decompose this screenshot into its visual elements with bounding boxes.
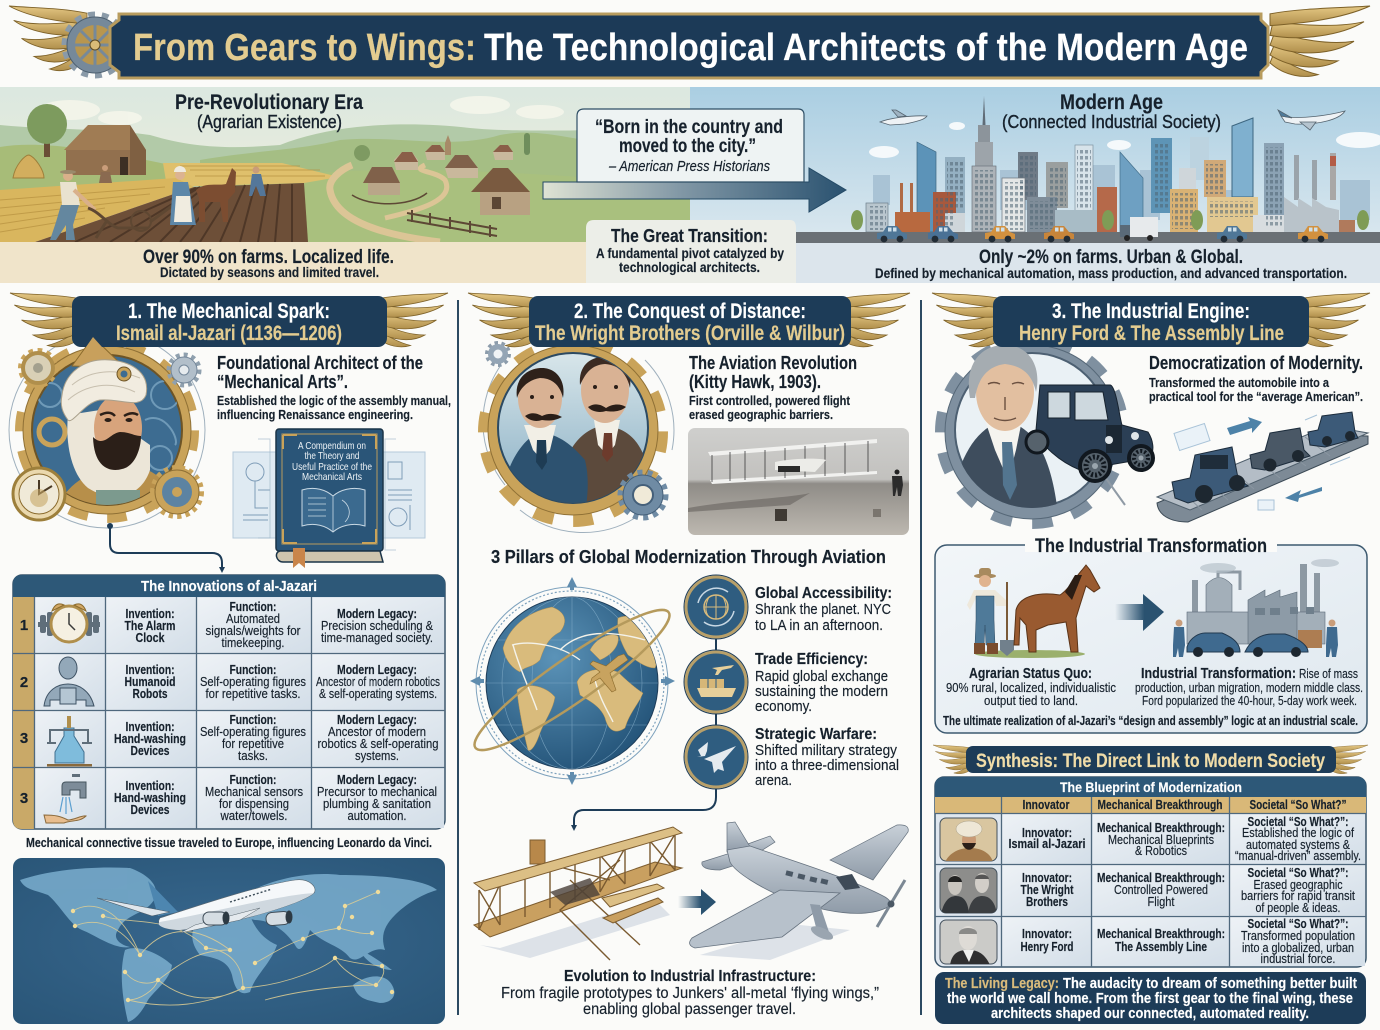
column headers: Societal “So What?” <box>1250 798 1346 812</box>
panel: the industrial transformation <box>935 535 1367 733</box>
text: urban caption: Only ~2% on farms. Urban & Global. <box>979 246 1243 268</box>
text: foundational architect: Foundational Architect of the <box>217 353 423 373</box>
landmasses <box>503 607 656 750</box>
photo: Kitty Hawk flight <box>688 428 909 535</box>
row 2 text: & self-operating systems. <box>319 687 437 701</box>
connector arrow <box>107 523 225 573</box>
column headers: Innovator <box>1022 798 1070 812</box>
thumbnail: Henry Ford <box>940 920 997 965</box>
figure: plowman <box>50 170 95 240</box>
text: foundational architect <box>217 353 451 422</box>
pillar: global accessibility: to LA in an afternoon. <box>755 617 883 634</box>
pillar: strategic warfare: into a three-dimensional <box>755 757 899 774</box>
text: industrial transformation: Industrial Transformation: <box>1141 665 1296 682</box>
arrow: transition <box>543 168 846 212</box>
belt cars <box>1172 412 1358 503</box>
row 4 text: plumbing & sanitation <box>323 797 431 811</box>
row 1 text: Clock <box>136 631 165 645</box>
icon: gold gear <box>21 351 55 385</box>
row: Henry Ford <box>1020 917 1355 966</box>
icon: right wing <box>1270 6 1370 76</box>
icon: farmer <box>967 568 1085 658</box>
row: Wright Brothers: Flight <box>1148 895 1175 909</box>
row 2 text: Modern Legacy: <box>337 663 417 677</box>
icon: gold plane <box>590 654 628 692</box>
text: farms caption <box>143 246 394 280</box>
pillar: strategic warfare: Shifted military strategy <box>755 742 897 759</box>
icon: left wing and gear <box>9 6 125 75</box>
row 1 text: Precision scheduling & <box>321 619 434 633</box>
row numbers: 3 <box>20 730 28 747</box>
callout: quote: moved to the city.” <box>619 135 756 157</box>
row 2 text <box>124 663 440 701</box>
row: al-Jazari: automated systems & <box>1246 838 1351 852</box>
row: Henry Ford: Mechanical Breakthrough: <box>1097 927 1225 941</box>
icon: faucet and hand <box>44 774 86 823</box>
pillar: trade efficiency: sustaining the modern <box>755 683 888 700</box>
text: urban caption <box>875 246 1347 281</box>
row: Wright Brothers: Erased geographic <box>1254 878 1342 892</box>
row: al-Jazari: “manual-driven” assembly. <box>1235 849 1361 863</box>
row 4 text: Devices <box>130 803 170 817</box>
row numbers <box>20 617 28 807</box>
column headers <box>1022 798 1346 812</box>
row 4 text: Hand-washing <box>114 791 186 805</box>
callout: quote: – American Press Historians <box>608 158 770 175</box>
row 3 text: Hand-washing <box>114 732 186 746</box>
text: industrial transformation: Rise of mass <box>1299 666 1358 681</box>
icon: robot <box>44 657 94 706</box>
text: aviation revolution <box>689 353 857 422</box>
row: al-Jazari: Mechanical Breakthrough: <box>1097 821 1225 835</box>
row 1 text: Automated <box>226 612 280 626</box>
road <box>330 165 440 242</box>
row 1 text: Function: <box>230 600 276 614</box>
text: connective tissue note: Mechanical connective tissue traveled to Europe, influencing Leonardo da Vinci. <box>26 835 432 850</box>
row 1 text: Invention: <box>126 607 174 621</box>
ghost parts <box>1174 415 1350 510</box>
text: aviation revolution: The Aviation Revolution <box>689 353 857 373</box>
row 3 text <box>114 713 439 763</box>
plowed field <box>35 183 308 242</box>
text: aviation revolution: First controlled, powered flight <box>689 393 851 408</box>
row: Wright Brothers: Brothers <box>1026 895 1068 909</box>
text: agrarian status quo: 90% rural, localized, individualistic <box>946 680 1116 695</box>
text: agrarian status quo: Agrarian Status Quo: <box>969 665 1092 682</box>
pillar: global accessibility: Global Accessibility: <box>755 585 892 602</box>
city nodes <box>71 890 394 1002</box>
row numbers: 3 <box>20 790 28 807</box>
column headers: Mechanical Breakthrough <box>1098 798 1222 812</box>
flow arrows <box>1227 417 1262 435</box>
footer strip right <box>690 243 1380 283</box>
header: section 3: 3. The Industrial Engine: <box>1052 300 1250 323</box>
direction arrows <box>470 577 675 785</box>
pillar: strategic warfare: arena. <box>755 772 792 789</box>
row: Wright Brothers: of people & ideas. <box>1256 901 1340 915</box>
row: Henry Ford: industrial force. <box>1260 952 1336 966</box>
icon: ship and plane <box>684 650 748 714</box>
row: Henry Ford: Societal “So What?”: <box>1248 917 1348 931</box>
text: agrarian status quo <box>946 665 1116 708</box>
row: al-Jazari: Mechanical Blueprints <box>1108 833 1214 847</box>
header: synthesis <box>933 745 1368 774</box>
text: aviation revolution: erased geographic barriers. <box>689 407 833 422</box>
pillar: strategic warfare: Strategic Warfare: <box>755 726 877 743</box>
icon: assembly line <box>1157 412 1368 522</box>
icon: compendium book: Mechanical Arts <box>302 471 362 483</box>
header: section 2: The Wright Brothers (Orville & Wilbur) <box>535 322 845 345</box>
icon: biplane <box>474 827 682 960</box>
row 4 text: Invention: <box>126 779 174 793</box>
figure: right brother <box>557 358 644 503</box>
row: Henry Ford: Transformed population <box>1241 929 1355 943</box>
text: foundational architect: “Mechanical Arts”. <box>217 372 348 392</box>
text: evolution caption: enabling global passenger travel. <box>583 1001 796 1018</box>
text: democratization <box>1149 353 1363 404</box>
row 3 text: for repetitive <box>222 737 284 751</box>
text: aviation revolution: (Kitty Hawk, 1903). <box>689 372 821 392</box>
row: Henry Ford: Henry Ford <box>1020 940 1074 954</box>
text: agrarian status quo: output tied to land. <box>984 693 1078 708</box>
row: Wright Brothers: barriers for rapid transit <box>1241 889 1355 903</box>
row: Henry Ford: The Assembly Line <box>1115 940 1207 954</box>
icon: all-metal plane <box>690 822 908 960</box>
table: blueprint of modernization <box>935 777 1366 967</box>
globe with flight paths <box>463 577 681 785</box>
icon: small gear <box>487 343 509 365</box>
callout: the living legacy: architects shaped our connected, automated reality. <box>991 1006 1309 1022</box>
city buildings <box>866 96 1355 232</box>
heading: modern age: Modern Age <box>1060 91 1163 114</box>
portrait: al-Jazari in gear <box>9 332 205 528</box>
row 2 text: Self-operating figures <box>200 675 306 689</box>
callout: the living legacy: The Living Legacy: <box>945 976 1059 992</box>
thumbnail: al-Jazari <box>940 818 997 862</box>
routes <box>73 892 384 1005</box>
icon: compendium book: the Theory and <box>304 450 360 462</box>
icon: model T car <box>1026 385 1153 481</box>
row 3 text: tasks. <box>238 749 268 763</box>
arrow: transformation <box>1115 594 1164 631</box>
heading: pre-revolutionary era: (Agrarian Existence) <box>197 112 342 132</box>
row 1 text <box>124 600 434 650</box>
row 3 text: Function: <box>230 713 276 727</box>
pillar: trade efficiency: economy. <box>755 698 812 715</box>
panel: the industrial transformation: The Industrial Transformation <box>1035 535 1267 557</box>
plow <box>88 200 180 238</box>
row 1 text: timekeeping. <box>222 636 284 650</box>
text: foundational architect: influencing Renaissance engineering. <box>217 407 413 422</box>
callout: the great transition <box>586 220 796 283</box>
scene: modern city <box>690 87 1380 243</box>
row: Wright Brothers: Societal “So What?”: <box>1248 866 1348 880</box>
row numbers: 2 <box>20 674 28 691</box>
header: section 1 <box>10 293 448 347</box>
heading: modern age: (Connected Industrial Society) <box>1002 112 1221 132</box>
icon: hat tip <box>86 337 102 347</box>
row: al-Jazari: Ismail al-Jazari <box>1008 837 1086 851</box>
icon: compendium book: A Compendium on <box>298 440 366 452</box>
row: al-Jazari: & Robotics <box>1135 844 1187 858</box>
thumbnail: Wright Brothers <box>940 868 997 914</box>
banner plate <box>110 14 1268 78</box>
row 2 text: Function: <box>230 663 276 677</box>
panel: section 2, Wright Brothers <box>463 293 910 1018</box>
header: section 2: 2. The Conquest of Distance: <box>574 300 806 323</box>
icon: tree <box>27 104 67 157</box>
panel: transition band <box>0 87 1380 283</box>
icon: compendium book <box>276 429 383 568</box>
pillars connector <box>571 607 716 831</box>
window patterns <box>868 142 1282 230</box>
row 4 text: Precursor to mechanical <box>317 785 437 799</box>
row 3 text: robotics & self-operating <box>318 737 439 751</box>
title text: From Gears to Wings: <box>133 27 476 69</box>
row 3 text: Devices <box>130 744 170 758</box>
row: al-Jazari <box>1008 815 1361 863</box>
icon: grey gear <box>169 355 199 385</box>
footer strip left <box>0 242 690 283</box>
heading: pre-revolutionary era: Pre-Revolutionary Era <box>175 91 363 114</box>
figure: horse <box>196 168 236 222</box>
row 4 text: Mechanical sensors <box>205 785 303 799</box>
arrow: evolution <box>678 889 716 915</box>
icon: jets <box>684 725 748 789</box>
row 1 text: The Alarm <box>124 619 176 633</box>
table: blueprint of modernization: The Blueprint of Modernization <box>1060 780 1242 795</box>
heading: pre-revolutionary era <box>175 91 363 132</box>
row 2 text: Invention: <box>126 663 174 677</box>
text: evolution caption: Evolution to Industrial Infrastructure: <box>564 968 816 985</box>
row 2 text: Humanoid <box>124 675 176 689</box>
trees <box>851 210 1369 230</box>
row: Wright Brothers: Innovator: <box>1022 871 1072 885</box>
row 3 text: Ancestor of modern <box>328 725 426 739</box>
row: Henry Ford: into a globalized, urban <box>1242 941 1354 955</box>
title banner: The Technological Architects of the Modern Age <box>484 27 1248 69</box>
icon: clock <box>13 468 65 520</box>
icon: village houses <box>354 133 530 215</box>
portrait: Wright Brothers in gear <box>483 343 674 532</box>
back wheat field <box>163 163 339 187</box>
icon: globe arrows <box>684 575 748 639</box>
figure: worker <box>249 166 266 196</box>
title banner <box>9 6 1370 78</box>
row 3 text: Self-operating figures <box>200 725 306 739</box>
icon: airliner <box>97 880 315 933</box>
text: industrial transformation <box>1135 665 1363 708</box>
row 4 text: water/towels. <box>220 809 288 823</box>
portrait: Henry Ford in gear <box>942 342 1153 522</box>
continents <box>20 868 437 1022</box>
figure: left brother <box>510 368 588 503</box>
icon: barn <box>64 125 146 175</box>
row 2 text: Ancestor of modern robotics <box>316 675 440 689</box>
table: innovations of al-Jazari <box>13 575 445 829</box>
text: evolution caption: From fragile prototypes to Junkers' all-metal ‘flying wings,” <box>501 985 879 1002</box>
icon: factory <box>1173 559 1339 657</box>
header: section 3 <box>932 293 1370 347</box>
row 3 text: systems. <box>355 749 399 763</box>
callout: the great transition: technological architects. <box>619 259 760 275</box>
row: Henry Ford: Innovator: <box>1022 927 1072 941</box>
row 4 text: automation. <box>348 809 406 823</box>
row 3 text: Invention: <box>126 720 174 734</box>
header: section 3: Henry Ford & The Assembly Line <box>1019 322 1284 345</box>
row: Wright Brothers <box>1020 866 1355 915</box>
pillar: global accessibility: Shrank the planet. NYC <box>755 601 891 618</box>
row 3 text: Modern Legacy: <box>337 713 417 727</box>
row: Wright Brothers: Controlled Powered <box>1114 883 1208 897</box>
callout: the living legacy <box>935 972 1366 1024</box>
row 1 text: signals/weights for <box>206 624 300 638</box>
row: al-Jazari: Societal “So What?”: <box>1248 815 1348 829</box>
row: Wright Brothers: The Wright <box>1020 883 1074 897</box>
fence <box>407 210 497 237</box>
pillar: trade efficiency <box>684 650 888 715</box>
icon: compendium book: Useful Practice of the <box>292 461 372 473</box>
row 4 text <box>114 773 437 823</box>
icon: large gear <box>621 473 665 517</box>
road with cars <box>796 232 1380 243</box>
row 2 text: for repetitive tasks. <box>206 687 300 701</box>
row 4 text: Modern Legacy: <box>337 773 417 787</box>
row 4 text: Function: <box>230 773 276 787</box>
text: farms caption: Over 90% on farms. Localized life. <box>143 246 394 268</box>
text: foundational architect: Established the logic of the assembly manual, <box>217 393 451 408</box>
callout: the great transition: The Great Transition: <box>611 226 768 246</box>
panel: section 1, al-Jazari <box>9 293 451 1024</box>
row 1 text: time-managed society. <box>321 631 433 645</box>
heading: 3 pillars: 3 Pillars of Global Modernization Through Aviation <box>491 546 886 567</box>
icon: blueprints <box>233 439 425 550</box>
icon: horse <box>1014 565 1100 652</box>
callout: the great transition: A fundamental pivot catalyzed by <box>596 245 784 261</box>
map: global air network <box>13 858 445 1024</box>
row: Wright Brothers: Mechanical Breakthrough: <box>1097 871 1225 885</box>
heading: modern age <box>1002 91 1221 132</box>
text: democratization: Transformed the automobile into a <box>1149 376 1330 390</box>
row: al-Jazari: Innovator: <box>1022 826 1072 840</box>
scene: pre-revolutionary farmland <box>0 87 690 242</box>
icon: haystack <box>13 155 44 178</box>
pillar: trade efficiency: Rapid global exchange <box>755 668 888 685</box>
text: farms caption: Dictated by seasons and limited travel. <box>160 264 379 280</box>
panel: section 3, Henry Ford <box>932 293 1370 1024</box>
callout: quote: “Born in the country and <box>595 116 783 138</box>
pillar: trade efficiency: Trade Efficiency: <box>755 651 868 668</box>
header: section 2 <box>468 293 910 347</box>
row: al-Jazari: Established the logic of <box>1242 826 1354 840</box>
callout: quote <box>577 109 804 182</box>
row 4 text: for dispensing <box>219 797 289 811</box>
pillar: strategic warfare <box>684 725 899 789</box>
icon: alarm clock <box>38 604 100 642</box>
row numbers: 1 <box>20 617 28 634</box>
header: section 1: 1. The Mechanical Spark: <box>128 300 330 323</box>
icon: cog with blue dial <box>153 468 201 516</box>
text: evolution caption <box>501 968 879 1018</box>
pillar: global accessibility <box>684 575 892 639</box>
header: section 1: Ismail al-Jazari (1136—1206) <box>116 322 342 345</box>
table: innovations of al-Jazari: The Innovations of al-Jazari <box>141 578 317 595</box>
icon: hand-washing bottle <box>47 716 92 766</box>
front wheat field <box>0 178 194 242</box>
row 2 text: Robots <box>132 687 168 701</box>
icon: airplanes <box>880 110 1345 130</box>
row 1 text: Modern Legacy: <box>337 607 417 621</box>
background towers <box>873 165 1370 220</box>
figure: woman <box>170 166 196 225</box>
